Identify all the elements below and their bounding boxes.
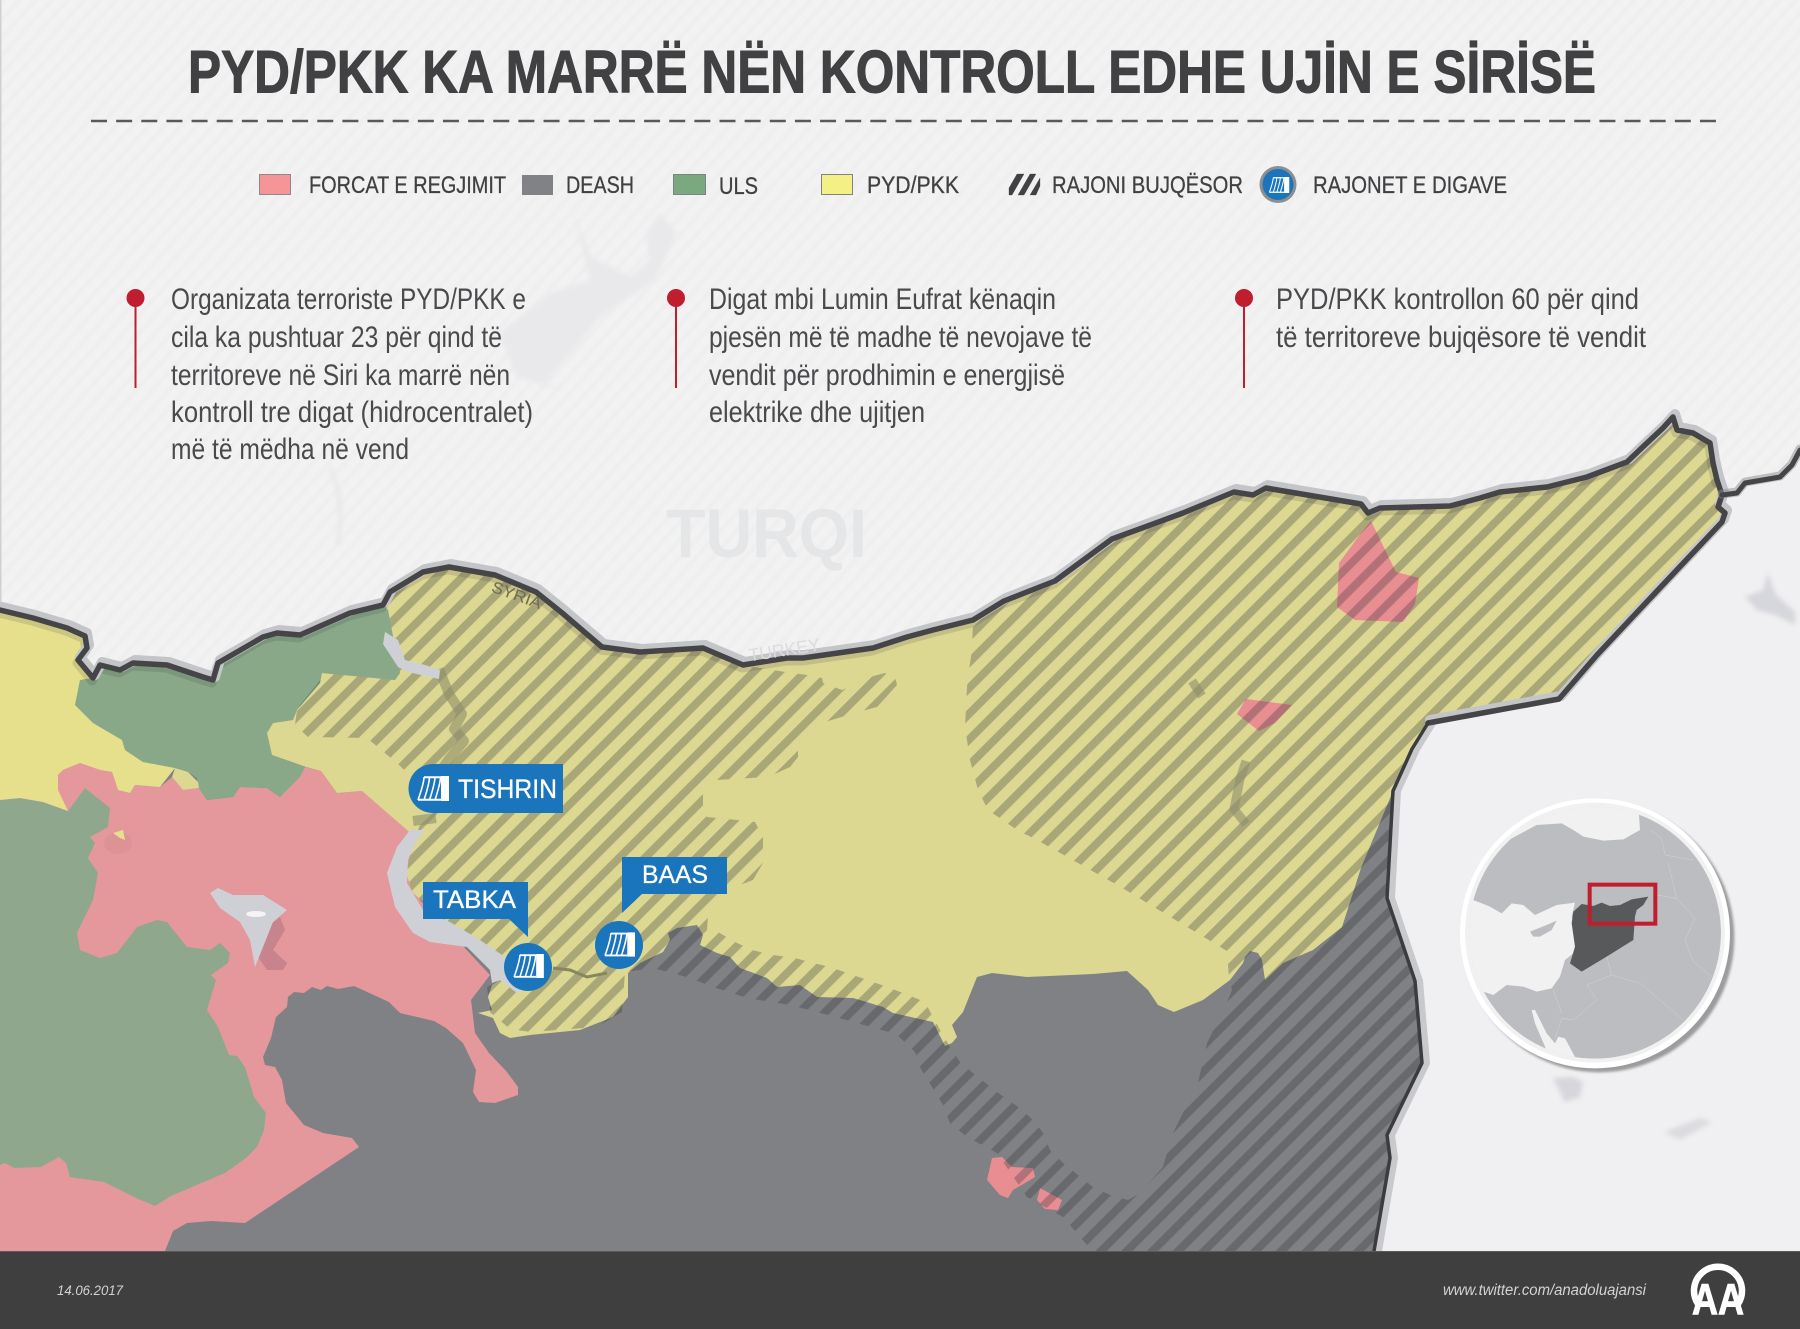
legend: ULS — [674, 173, 758, 200]
paragraph 1: territoreve në Siri ka marrë nën — [171, 359, 510, 392]
text block 3 — [1235, 283, 1647, 388]
dam label: TABKA — [423, 882, 528, 937]
region: PYD west — [0, 610, 175, 811]
Euphrates river and lake — [383, 632, 1246, 993]
country label: TURQI: TURQI — [666, 495, 867, 572]
paragraph 1: Organizata terroriste PYD/PKK e — [171, 283, 526, 316]
paragraph 1: më të mëdha në vend — [171, 433, 409, 466]
small enclave — [104, 830, 132, 854]
legend: regime forces: FORCAT E REGJIMIT — [309, 172, 506, 199]
paragraph 2: Digat mbi Lumin Eufrat kënaqin — [709, 283, 1056, 316]
hatch: agricultural region — [295, 417, 1725, 1251]
bullet 3 — [1235, 289, 1253, 388]
legend: dam regions — [1260, 166, 1507, 203]
paragraph 2: elektrike dhe ujitjen — [709, 396, 925, 429]
paragraph 1: cila ka pushtuar 23 për qind të — [171, 321, 502, 354]
regime pockets — [987, 521, 1419, 1210]
legend: agricultural region: RAJONI BUJQËSOR — [1052, 172, 1243, 199]
dam marker: Baas — [595, 921, 643, 969]
decorative features: lakes in Iraq — [1553, 573, 1795, 1140]
dam label: BAAS — [622, 857, 727, 913]
source url: www.twitter.com/anadoluajansi — [1443, 1282, 1647, 1299]
map label: SYRIA: SYRIA — [489, 579, 544, 613]
shadow in north region — [297, 678, 322, 716]
paragraph 3: PYD/PKK kontrollon 60 për qind — [1276, 283, 1639, 316]
legend: DEASH: DEASH — [566, 172, 634, 199]
dam label: TISHRIN: TISHRIN — [458, 774, 557, 804]
map label: TURKEY: TURKEY — [747, 634, 821, 665]
text block 1 — [126, 283, 533, 466]
legend: DEASH — [522, 172, 634, 199]
region: PYD east — [267, 417, 1725, 1046]
locator globe — [1453, 793, 1734, 1072]
paragraph 1: kontroll tre digat (hidrocentralet) — [171, 396, 533, 429]
region: regime forces — [0, 763, 518, 1251]
legend: dam regions: RAJONET E DIGAVE — [1313, 172, 1507, 199]
paragraph 2 — [709, 283, 1092, 429]
date: 14.06.2017 — [57, 1282, 124, 1298]
Lake Jabbul — [210, 888, 287, 970]
logo: Anadolu Agency: AA — [1692, 1275, 1744, 1324]
legend: regime forces — [260, 172, 506, 199]
region: FSA north — [75, 605, 400, 800]
border line — [0, 417, 1800, 1251]
title divider — [91, 120, 1716, 122]
map of northern Syria — [0, 414, 1800, 1251]
paragraph 2: vendit për prodhimin e energjisë — [709, 359, 1065, 392]
small patch — [172, 768, 199, 790]
legend — [260, 166, 1507, 203]
dam label: BAAS: BAAS — [642, 861, 708, 889]
border halo — [0, 414, 1727, 1251]
bullet 2 — [667, 289, 685, 388]
region: Iraq side — [1374, 450, 1800, 1251]
bullet 1 — [126, 289, 144, 388]
footer — [0, 1251, 1800, 1329]
legend: ULS: ULS — [719, 173, 758, 200]
legend: PYD/PKK: PYD/PKK — [867, 172, 959, 199]
paragraph 3: të territoreve bujqësore të vendit — [1276, 321, 1647, 354]
dam marker: Tabka — [504, 943, 552, 991]
region: FSA west — [0, 788, 266, 1206]
legend: PYD/PKK — [822, 172, 959, 199]
paragraph 3 — [1276, 283, 1647, 354]
text block 2 — [667, 283, 1092, 429]
paragraph 2: pjesën më të madhe të nevojave të — [709, 321, 1092, 354]
region: DEASH — [0, 417, 1725, 1251]
dam label: TABKA: TABKA — [433, 886, 516, 914]
dam label: TISHRIN — [408, 764, 563, 813]
paragraph 1 — [171, 283, 533, 466]
